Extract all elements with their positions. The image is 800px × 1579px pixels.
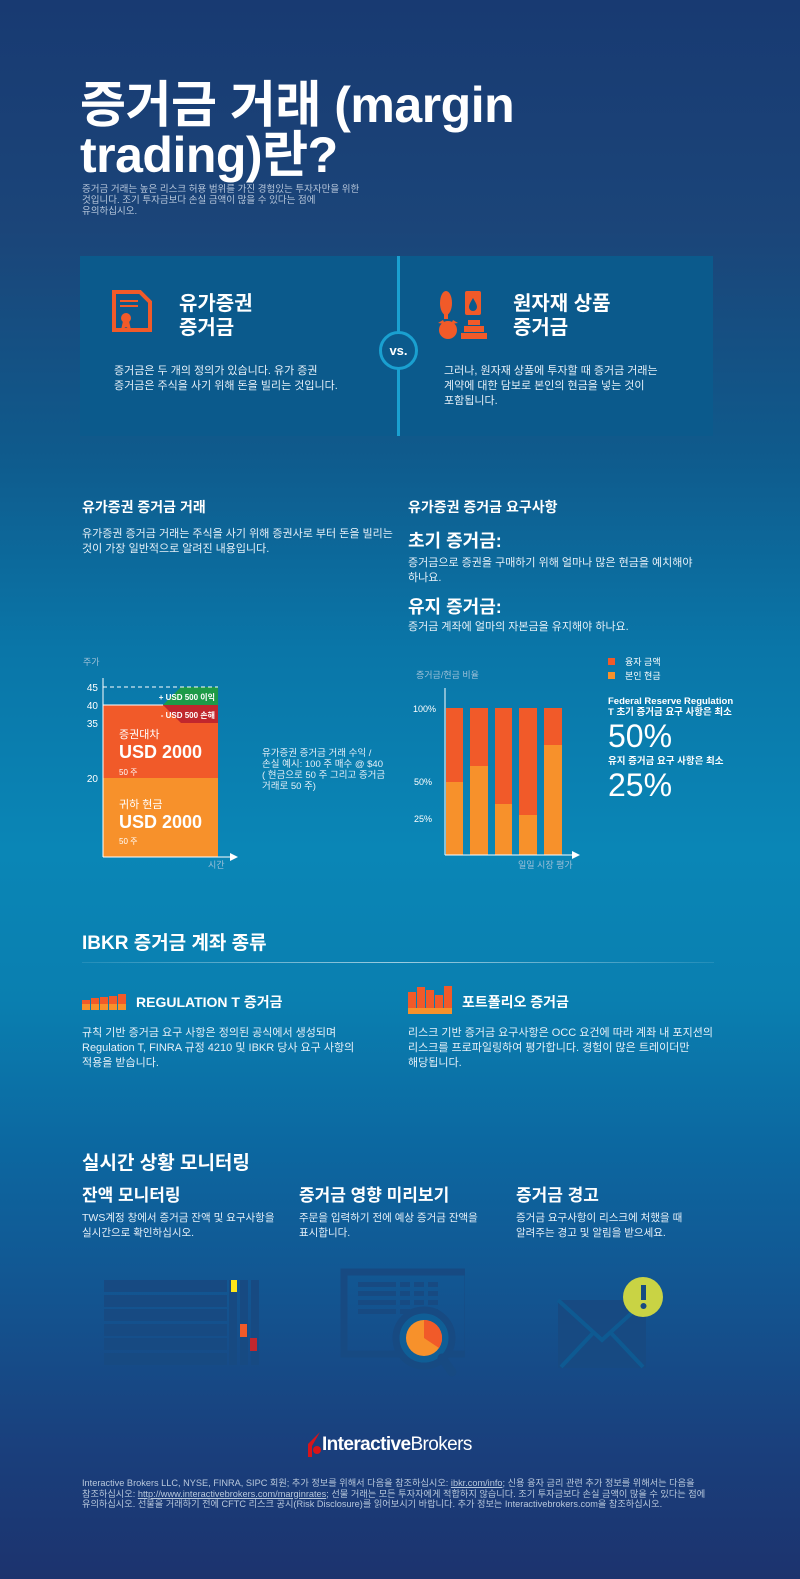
stats callout: 50% [608,718,672,754]
chart: stock price example: 주가 [83,657,100,667]
chart: stock price example: USD 2000 [119,812,202,832]
chart: margin ratio bars: 25% [414,814,432,824]
maintenance margin block [408,597,629,633]
legend [608,657,661,681]
column: balance monitoring: 잔액 모니터링 [82,1186,181,1205]
heading: real-time monitoring: 실시간 상황 모니터링 [82,1153,250,1174]
chart: margin ratio bars: 50% [414,777,432,787]
icon: bars [408,986,452,1014]
column: margin preview: 증거금 영향 미리보기 [299,1186,449,1205]
panel: portfolio margin: 포트폴리오 증거금 [462,994,569,1010]
panel: portfolio margin: 리스크 기반 증거금 요구사항은 OCC 요건에 따라 계좌 내 포지션의 리스크를 프로파일링하여 평가합니다. 경험이 많은 트레이더만 해당됩니다. [408,1027,713,1069]
initial margin block: 증거금으로 증권을 구매하기 위해 얼마나 많은 현금을 예치해야 하나요. [408,557,693,584]
panel: securities vs commodities [80,256,713,436]
stats callout: 유지 증거금 요구 사항은 최소 [608,756,723,767]
text: securities margin trading: 유가증권 증거금 거래는 주식을 사기 위해 증권사로 부터 돈을 빌리는 것이 가장 일반적으로 알려진 내용입니다. [82,528,393,555]
footer disclaimer: Interactive Brokers LLC, NYSE, FINRA, SIPC 회원; 추가 정보를 위해서 다음을 참조하십시오: ibkr.com/info; 신용 융자 금리 관련 추가 정보를 위해서는 다음을 참조하십시오: http://www.interactivebrokers.com/marginrates; 선물 거래는 모든 투자자에게 적합하지 않습니다. 조기 투자금보다 손실 금액이 많을 수 있다는 점에 유의하십시오. 선물을 거래하기 전에 CFTC 리스크 공시(Risk Disclosure)를 읽어보시기 바랍니다. 추가 정보는 Interactivebrokers.com을 참조하십시오. [82,1478,705,1509]
chart: stock price example: 귀하 현금 [119,797,163,811]
text: securities: 증거금은 두 개의 정의가 있습니다. 유가 증권 증거금은 주식을 사기 위해 돈을 빌리는 것입니다. [114,365,338,392]
legend: 융자 금액 [625,657,661,667]
chart: margin ratio bars [413,670,580,870]
column: margin alerts: 증거금 경고 [516,1186,599,1205]
heading: requirements: 유가증권 증거금 요구사항 [408,499,557,515]
maintenance margin block: 유지 증거금: [408,597,502,617]
icon: magnifier report [340,1268,465,1362]
column: margin alerts: 증거금 요구사항이 리스크에 처했을 때 알려주는 경고 및 알림을 받으세요. [516,1212,682,1239]
icon: vs circle [379,331,418,370]
chart: margin ratio bars: 증거금/현금 비율 [416,670,479,680]
icon: vs circle: vs. [389,343,408,358]
chart: margin ratio bars: 100% [413,704,436,714]
chart: stock price example: 35 [87,719,98,730]
chart caption: 유가증권 증거금 거래 수익 / 손실 예시: 100 주 매수 @ $40 ( 현금으로 50 주 그리고 증거금 거래로 50 주) [262,748,385,792]
heading: commodity margin [513,293,611,339]
heading: securities margin: 유가증권 [179,293,253,315]
chart: margin ratio bars: 일일 시장 평가 [518,860,573,870]
chart: stock price example: 시간 [208,860,225,870]
heading: securities margin: 증거금 [179,317,234,339]
chart: stock price example: 20 [87,774,98,785]
chart: stock price example: - USD 500 손해 [161,710,215,720]
icon: email alert [558,1277,663,1368]
chart: stock price example: 45 [87,683,98,694]
chart: stock price example: 증권대차 [119,728,159,741]
legend: 본인 현금 [625,671,661,681]
chart: stock price example: 50 주 [119,768,137,777]
heading: IBKR account types: IBKR 증거금 계좌 종류 [82,933,267,954]
icon: account table [104,1280,259,1351]
title: 증거금 거래 (margin trading)란? [80,77,514,183]
icon: commodities [438,291,487,339]
chart: stock price example: + USD 500 이익 [159,692,215,702]
panel: Regulation T: REGULATION T 증거금 [136,994,282,1010]
column: margin alerts [516,1186,682,1239]
icon: certificate [112,290,152,332]
chart: stock price example: USD 2000 [119,742,202,762]
heading: securities margin [179,293,253,339]
logo: Interactive Brokers: InteractiveBrokers [322,1434,472,1455]
chart: stock price example [83,657,238,870]
column: margin preview: 주문을 입력하기 전에 예상 증거금 잔액을 표시합니다. [299,1212,478,1239]
column: balance monitoring: TWS계정 창에서 증거금 잔액 및 요구사항을 실시간으로 확인하십시오. [82,1212,274,1239]
text: commodity: 그러나, 원자재 상품에 투자할 때 증거금 거래는 계약에 대한 담보로 본인의 현금을 넣는 것이 포함됩니다. [444,365,658,407]
panel: Regulation T: 규칙 기반 증거금 요구 사항은 정의된 공식에서 생성되며 Regulation T, FINRA 규정 4210 및 IBKR 당사 요구 사항의 적용을 받습니다. [82,1027,354,1069]
panel: Regulation T [82,994,354,1069]
initial margin block [408,531,693,584]
stats callout: Federal Reserve Regulation T 초기 증거금 요구 사항은 최소 [608,696,733,718]
subtitle: 증거금 거래는 높은 리스크 허용 범위를 가진 경험있는 투자자만을 위한 것입니다. 조기 투자금보다 손실 금액이 많을 수 있다는 점에 유의하십시오. [82,184,359,217]
stats callout: 25% [608,767,672,803]
heading: securities margin trading: 유가증권 증거금 거래 [82,499,206,515]
heading: commodity margin: 원자재 상품 [513,293,611,315]
icon: bars [82,994,126,1010]
stats callout [608,696,733,803]
chart: stock price example: 50 주 [119,837,137,846]
panel: portfolio margin [408,986,713,1069]
initial margin block: 초기 증거금: [408,531,502,551]
heading: commodity margin: 증거금 [513,317,568,339]
maintenance margin block: 증거금 계좌에 얼마의 자본금을 유지해야 하나요. [408,621,629,633]
column: margin preview [299,1186,478,1239]
chart: stock price example: 40 [87,701,98,712]
column: balance monitoring [82,1186,274,1239]
